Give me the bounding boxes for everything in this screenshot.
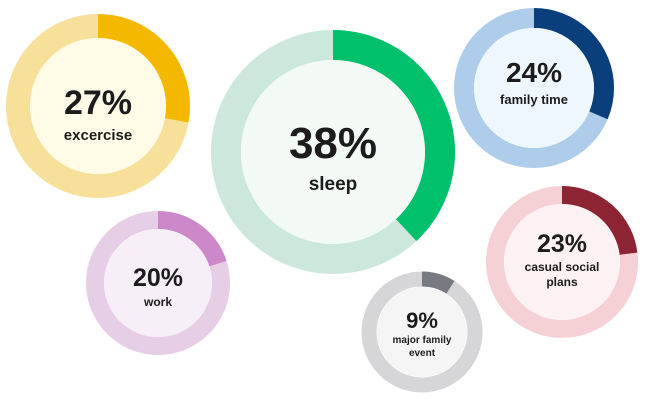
donut: exercise: 27%: [64, 84, 132, 122]
donut: casual social plans: plans: [546, 275, 578, 289]
donut: casual social plans: [495, 195, 629, 329]
donut: major family event: 9%: [406, 308, 438, 333]
donut: work: work: [143, 295, 172, 309]
donut: major family event: event: [409, 348, 436, 359]
donut: casual social plans: 23%: [537, 230, 587, 258]
donut: work: [95, 220, 221, 346]
donut: sleep: sleep: [309, 174, 357, 195]
donut: major family event: [369, 279, 475, 385]
donut: sleep: 38%: [289, 119, 377, 168]
donut: family time: family time: [500, 92, 568, 107]
donut: exercise: [18, 26, 178, 186]
donut: family time: [464, 18, 604, 158]
donut: family time: 24%: [506, 57, 562, 88]
donut: exercise: excercise: [64, 127, 132, 144]
donut: casual social plans: casual social: [525, 260, 599, 274]
donut: major family event: major family: [393, 335, 452, 346]
donut: sleep: [226, 45, 440, 259]
donut: work: 20%: [133, 264, 183, 292]
